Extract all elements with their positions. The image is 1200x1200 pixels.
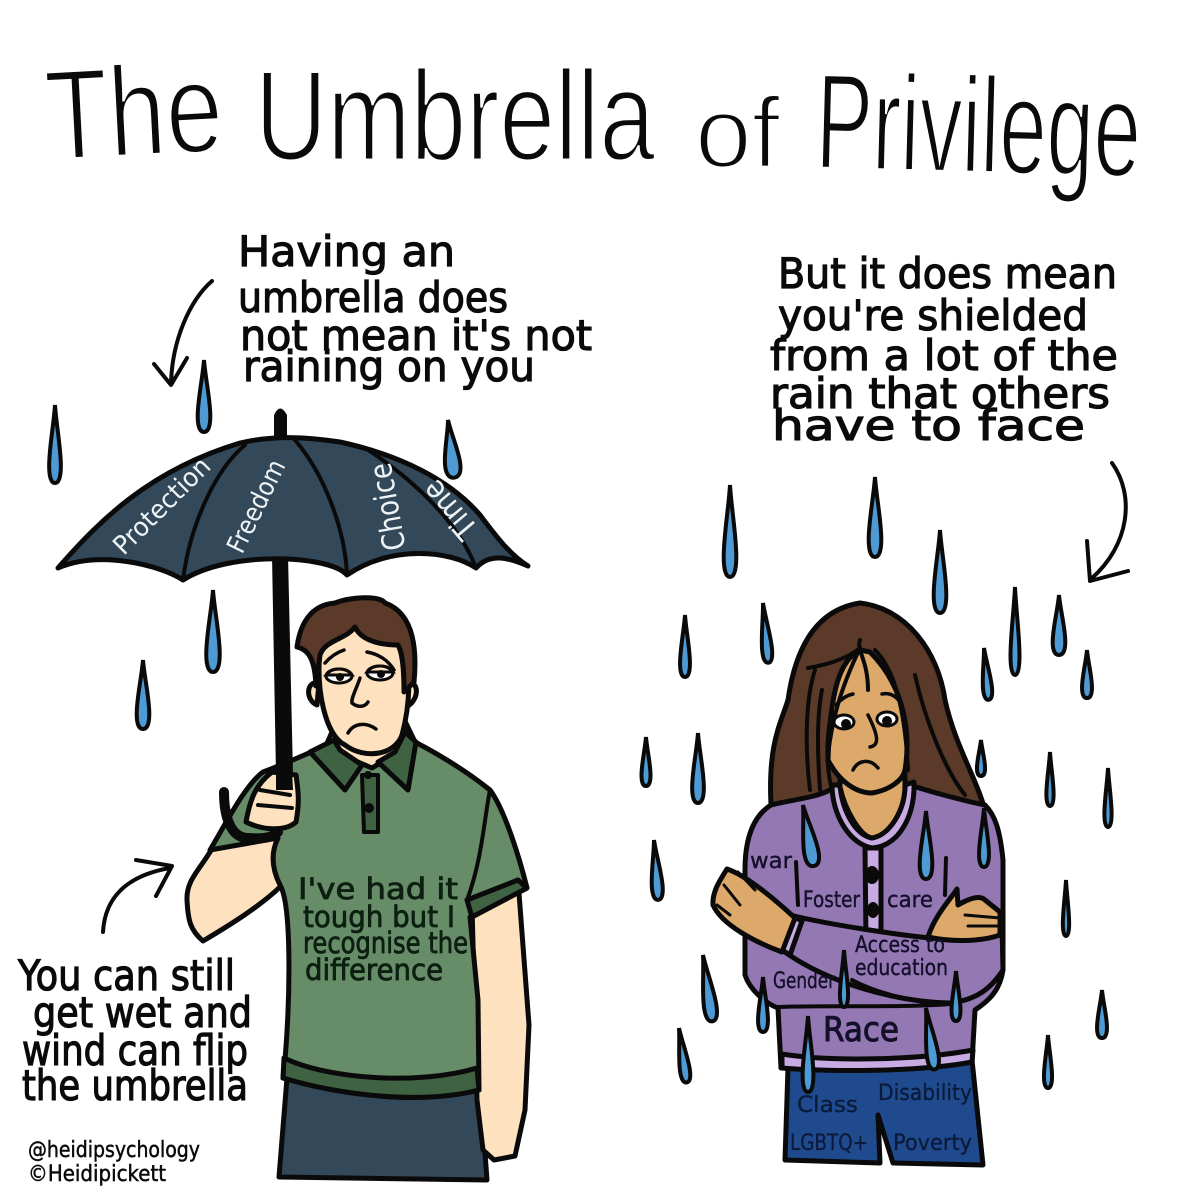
neckline bbox=[832, 782, 914, 848]
front hair strands bbox=[807, 640, 965, 795]
callout: you can still get wet: the umbrella bbox=[22, 1061, 248, 1110]
left upper arm bbox=[187, 830, 282, 941]
neck and head bbox=[297, 598, 416, 768]
sweater body bbox=[745, 785, 1003, 1068]
face details bbox=[325, 650, 394, 733]
left hand fingers bbox=[717, 872, 755, 915]
placket and buttons bbox=[362, 771, 378, 832]
right arm bbox=[472, 880, 529, 1160]
buttons bbox=[865, 866, 879, 918]
shirt bbox=[210, 742, 527, 1097]
title: Umbrella bbox=[255, 45, 656, 188]
raindrops around umbrella bbox=[49, 360, 462, 729]
neck and face bbox=[828, 650, 907, 838]
sweater text: Access to bbox=[855, 933, 945, 958]
canopy bbox=[58, 438, 528, 580]
umbrella bbox=[58, 408, 528, 775]
right hand bbox=[928, 889, 1000, 941]
canopy ribs bbox=[183, 440, 476, 580]
callout: you can still get wet: wind can flip bbox=[22, 1026, 248, 1075]
girl face details bbox=[834, 694, 902, 770]
title: of bbox=[695, 77, 780, 189]
credits bbox=[28, 1138, 200, 1187]
t-shirt text: recognise the bbox=[303, 926, 468, 960]
left hand bbox=[713, 869, 795, 952]
cuff bbox=[782, 916, 802, 955]
callout: having an umbrella: raining on you bbox=[243, 342, 535, 391]
sweater text bbox=[750, 849, 948, 1050]
sweater hem bbox=[782, 1050, 973, 1070]
right hand fingers bbox=[965, 915, 1000, 926]
callout: shielded from rain: from a lot of the bbox=[770, 331, 1118, 380]
credits: ©Heidipickett bbox=[28, 1162, 166, 1187]
sweater text: Race bbox=[823, 1010, 899, 1050]
jeans text: Poverty bbox=[893, 1131, 972, 1156]
canopy labels: Protection bbox=[108, 452, 217, 561]
jeans text bbox=[790, 1081, 972, 1156]
collar bbox=[310, 732, 416, 790]
hair bbox=[771, 603, 985, 810]
canopy labels: Freedom bbox=[221, 455, 292, 558]
callout: having an umbrella: not mean it's not bbox=[240, 311, 592, 360]
man bbox=[187, 598, 529, 1180]
jeans text: LGBTQ+ bbox=[790, 1131, 868, 1156]
t-shirt text: difference bbox=[305, 953, 443, 987]
callout: you can still get wet: You can still bbox=[17, 951, 235, 1000]
callout: having an umbrella: Having an bbox=[238, 227, 455, 276]
sweater text: Gender bbox=[773, 969, 836, 994]
sweater text: education bbox=[855, 956, 948, 981]
girl bbox=[713, 603, 1003, 1165]
sleeve cuff bbox=[467, 880, 527, 917]
t-shirt text bbox=[298, 872, 468, 987]
arrow: down to umbrella bbox=[154, 281, 212, 385]
jeans text: Disability bbox=[878, 1081, 972, 1106]
jeans text: Class bbox=[797, 1093, 858, 1118]
credits: @heidipsychology bbox=[28, 1138, 200, 1163]
callout: shielded from rain: have to face bbox=[772, 401, 1085, 450]
umbrella shaft bbox=[272, 555, 293, 775]
callout: shielded from rain: But it does mean bbox=[778, 249, 1117, 298]
sweater text: war bbox=[750, 849, 793, 874]
canopy labels: Choice bbox=[363, 460, 414, 553]
hand and handle hook bbox=[224, 770, 298, 838]
jeans bbox=[785, 1060, 983, 1165]
callout: having an umbrella bbox=[238, 227, 592, 391]
callout: shielded from rain: you're shielded bbox=[778, 291, 1088, 340]
arrow: to man's arm bbox=[103, 860, 172, 932]
umbrella tip bbox=[274, 408, 287, 440]
canopy labels: Time bbox=[415, 473, 486, 547]
callout: shielded from rain: rain that others bbox=[770, 369, 1110, 418]
callout: you can still get wet bbox=[17, 951, 252, 1110]
t-shirt text: I've had it bbox=[298, 872, 458, 906]
sleeve seams bbox=[778, 858, 955, 1007]
callout: you can still get wet: get wet and bbox=[33, 988, 252, 1037]
title: The bbox=[42, 36, 226, 188]
sweater text: care bbox=[887, 888, 933, 913]
title bbox=[42, 36, 1143, 205]
sweater text: Foster bbox=[803, 888, 861, 913]
t-shirt text: tough but I bbox=[303, 900, 455, 934]
canopy labels bbox=[108, 452, 486, 561]
pants bbox=[279, 1078, 487, 1180]
arrow: down to girl bbox=[1087, 463, 1128, 581]
raindrops around girl bbox=[642, 477, 1112, 1092]
callout: having an umbrella: umbrella does bbox=[238, 273, 508, 322]
shirt hem bbox=[283, 1058, 479, 1097]
crossed arm bbox=[782, 915, 1003, 1003]
placket bbox=[865, 848, 881, 940]
callout: shielded from rain bbox=[770, 249, 1118, 450]
